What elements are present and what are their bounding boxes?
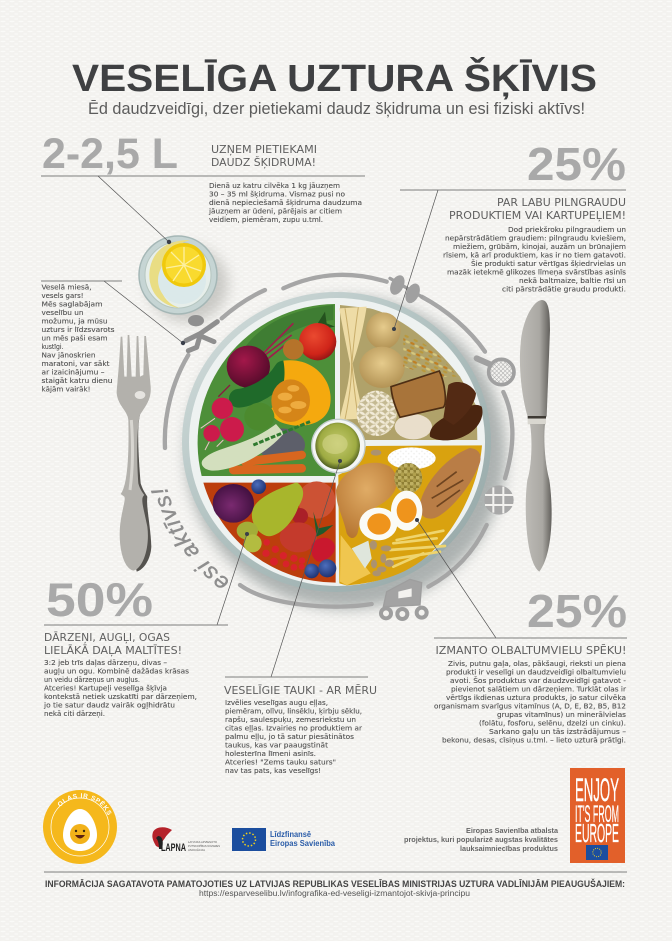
logo: LAPNA: LAPNA bbox=[161, 842, 186, 854]
footer source statement: INFORMĀCIJA SAGATAVOTA PAMATOJOTIES UZ LATVIJAS REPUBLIKAS VESELĪBAS MINISTRIJAS UZTURA VADLĪNIJĀM PIEAUGUŠAJIEM: bbox=[45, 878, 625, 889]
text: EU support note: projektus, kuri popularizē augstas kvalitātes bbox=[404, 837, 558, 844]
oil bowl bbox=[312, 419, 365, 473]
icon: roller skate bbox=[381, 579, 427, 619]
connector: fats bbox=[271, 459, 342, 677]
panel: physical activity text: Mēs saglabājam bbox=[42, 300, 102, 308]
panel: physical activity text: Nav jānoskrien bbox=[42, 352, 96, 360]
tomato bbox=[283, 312, 336, 360]
vegetables body text: Atceries! Kartupeļi veselīga šķīvja bbox=[44, 684, 167, 694]
icon: runner bbox=[186, 315, 217, 351]
cottage cheese bbox=[388, 447, 436, 469]
rice bbox=[357, 391, 397, 436]
bread bbox=[391, 371, 445, 417]
logo: Olas ir spēks badge bbox=[43, 790, 117, 864]
protein body text: (folātu, fosforu, selēnu, dzelzi un cinku). bbox=[479, 720, 626, 728]
flakes bbox=[395, 414, 432, 439]
logo: LAPNA bbox=[152, 827, 220, 854]
lettuce bbox=[258, 428, 305, 462]
seeds bbox=[403, 333, 457, 377]
fats body text: holesterīna līmeni asinīs. bbox=[225, 750, 316, 758]
green plums bbox=[237, 522, 258, 540]
connector: protein bbox=[415, 518, 496, 638]
liquids heading: DAUDZ ŠĶIDRUMA! bbox=[211, 156, 316, 169]
liquids body text bbox=[208, 182, 362, 224]
shadow of plate bbox=[186, 297, 506, 609]
protein body text: avoti. Šos produktus var daudzveidīgi gatavot - bbox=[450, 676, 627, 685]
logo: Enjoy it's from Europe bbox=[570, 768, 625, 863]
protein body text: produkti ir veselīgi un daudzveidīgi olbaltumvielu bbox=[446, 668, 626, 676]
vegetables body text: un veidu dārzeņus un augļus. bbox=[44, 676, 140, 685]
pumpkin bbox=[270, 360, 331, 426]
grains body text: citi pārstrādātie graudu produkti. bbox=[502, 286, 626, 294]
cucumber bbox=[238, 370, 283, 398]
leek bbox=[202, 424, 284, 471]
grains heading bbox=[449, 197, 626, 222]
protein body text: organismam svarīgus vitamīnus (A, D, E, B2, B5, B12 bbox=[434, 702, 626, 710]
eggs bbox=[359, 491, 422, 540]
panel: physical activity text: kājām vairāk! bbox=[42, 386, 90, 394]
panel: healthy fats bbox=[224, 677, 377, 775]
grains body text: nekā baltmaize, baltie rīsi un bbox=[519, 277, 626, 285]
fats heading: VESELĪGIE TAUKI - AR MĒRU bbox=[224, 684, 377, 697]
subtitle: Ēd daudzveidīgi, dzer pietiekami daudz šķidruma un esi fiziski aktīvs! bbox=[88, 99, 585, 118]
icon: knife bbox=[520, 300, 552, 572]
protein body text: grupas vitamīnus) un minerālvielas bbox=[497, 711, 627, 719]
vegetables heading: LIELĀKĀ DAĻA MALTĪTES! bbox=[44, 644, 182, 657]
icon: barbell bbox=[389, 274, 422, 304]
grains body text: Šie produkti satur vērtīgas šķiedrvielas un bbox=[471, 259, 626, 269]
carrots bbox=[233, 455, 302, 470]
nuts bbox=[370, 450, 394, 576]
curved slogan: esi aktīvs! bbox=[151, 489, 228, 588]
grains body text: nepārstrādātiem graudiem: pilngraudu kviešiem, bbox=[445, 234, 626, 242]
logo: LAPNA: PUTNKOPĪBAS NOZARES bbox=[188, 844, 220, 848]
protein body text: Zivis, putnu gaļa, olas, pākšaugi, rieksti un piena bbox=[448, 660, 626, 669]
spaghetti bbox=[339, 307, 367, 420]
panel: whole grains bbox=[400, 138, 627, 294]
liquids body text: jāuzņem ar ūdeni, pārējais ar citiem bbox=[208, 208, 342, 216]
vegetables heading bbox=[44, 631, 182, 657]
panel: physical activity text: vesels gars! bbox=[42, 292, 84, 300]
fats body text: nav tas pats, kas veselīgs! bbox=[225, 767, 321, 775]
vegetables body text: nekā citi dārzeņi. bbox=[44, 710, 105, 719]
blueberry bbox=[251, 479, 266, 494]
currants bbox=[262, 539, 305, 571]
vegetables body text: kontekstā netiek uzskatīti par dārzeņiem, bbox=[44, 693, 197, 702]
panel: physical activity text: veselību un bbox=[42, 309, 84, 317]
text: EU support note: Eiropas Savienība atbalsta bbox=[466, 828, 558, 835]
protein body text: vērtīgs ikdienas uztura produkts, jo satur cilvēka bbox=[446, 694, 626, 702]
grains body text: rīsiem, kā arī produktiem, kas ir no tiem gatavoti. bbox=[443, 252, 626, 260]
radishes bbox=[201, 398, 244, 450]
potatoes bbox=[366, 312, 401, 349]
grains body text: Dod priekšroku pilngraudiem un bbox=[508, 226, 626, 234]
pasta strips bbox=[387, 531, 445, 567]
connector: vegetables and fruit bbox=[217, 532, 249, 625]
vegetables body text: augļu un ogu. Kombinē dažādas krāsas bbox=[44, 668, 190, 676]
icon: fork bbox=[117, 335, 151, 572]
panel: physical activity text: ar izaicinājumu – bbox=[42, 368, 105, 376]
panel: physical activity text: možumu, ja mūsu bbox=[42, 318, 108, 326]
strawberry bbox=[311, 512, 335, 562]
connector: glass bbox=[98, 176, 171, 244]
fats body text: rapšu, saulespuķu, zemesriekstu un bbox=[225, 716, 356, 725]
protein figure: 25% bbox=[527, 585, 627, 637]
fats body text: Atceries! "Zems tauku saturs" bbox=[225, 758, 336, 766]
grains body text: miežiem, grūbām, kinojai, auzām un brūnajiem bbox=[453, 243, 626, 251]
icon: lemon slice bbox=[162, 243, 206, 287]
leaf bbox=[244, 403, 274, 431]
ring arcs bbox=[165, 275, 512, 607]
plate section: grains bbox=[339, 305, 483, 440]
panel: liquids bbox=[41, 130, 365, 224]
vegetables body text: 3:2 jeb trīs daļas dārzeņu, divas – bbox=[44, 659, 168, 668]
text: EU support note: lauksaimniecības produktus bbox=[460, 846, 558, 853]
fats body text: palmu eļļu, jo tā satur piesātinātos bbox=[225, 733, 355, 742]
liquids body text: veidiem, piemēram, zupu u.tml. bbox=[209, 216, 323, 224]
vegetables heading: DĀRZEŅI, AUGĻI, OGAS bbox=[44, 631, 170, 644]
connector: activity bbox=[104, 281, 185, 345]
fats body text: Izvēlies veselīgas augu eļļas, bbox=[225, 699, 328, 708]
fats body text: citas eļļas. Izvairies no produktiem ar bbox=[225, 724, 362, 734]
footer url: https://esparveselibu.lv/infografika-ed-veseligi-izmantojot-skivja-principu bbox=[199, 889, 470, 898]
panel: vegetables and fruit bbox=[43, 573, 228, 719]
vegetables figure: 50% bbox=[46, 573, 153, 626]
liquids body text: 30 – 35 ml šķidruma. Vismaz pusi no bbox=[209, 190, 345, 200]
panel: physical activity text: maratoni, var sākt bbox=[42, 360, 110, 368]
liquids heading: UZŅEM PIETIEKAMI bbox=[211, 144, 317, 156]
panel: physical activity text: Veselā miesā, bbox=[42, 284, 92, 292]
logo: EU flag co-financing bbox=[232, 828, 336, 851]
plate bbox=[182, 292, 491, 592]
dark bread bbox=[430, 382, 483, 440]
panel: physical activity text: kustīgi. bbox=[42, 343, 64, 351]
blueberries bbox=[304, 564, 319, 578]
vegetables body text: jo tie satur daudz vairāk ogļhidrātu bbox=[43, 702, 175, 710]
icon: tennis racket bbox=[477, 358, 514, 385]
fats body text bbox=[225, 699, 362, 775]
liquids body text: dienā nepieciešamā šķidruma daudzuma bbox=[209, 199, 362, 208]
title: VESELĪGA UZTURA ŠĶĪVIS bbox=[72, 55, 597, 100]
panel: physical activity text bbox=[41, 281, 122, 394]
logo: Olas ir spēks badge: OLAS IR SPĒKS bbox=[58, 793, 112, 815]
protein body text: bekonu, desas, cīsiņus u.tml. – lieto uzturā prātīgi. bbox=[442, 736, 626, 746]
liquids heading bbox=[211, 144, 317, 169]
protein body text: Sarkano gaļu un tās izstrādājumus – bbox=[489, 728, 627, 737]
cheese bbox=[340, 535, 371, 585]
connector: grains bbox=[392, 190, 438, 331]
protein heading: IZMANTO OLBALTUMVIELU SPĒKU! bbox=[436, 644, 626, 657]
fats body text: piemēram, olīvu, linsēklu, ķirbju sēklu, bbox=[225, 708, 362, 716]
panel: protein bbox=[434, 585, 627, 746]
panel: physical activity text: un mēs paši esam bbox=[42, 334, 108, 342]
grains figure: 25% bbox=[527, 138, 626, 190]
panel: physical activity text: uzturs ir līdzsvarots bbox=[42, 326, 115, 334]
pear bbox=[252, 482, 303, 536]
fats body text: taukus, kas var paaugstināt bbox=[225, 742, 328, 750]
liquids body text: Dienā uz katru cilvēka 1 kg jāuzņem bbox=[209, 182, 340, 191]
plate section: vegetables bbox=[198, 304, 336, 476]
footer bbox=[44, 872, 627, 898]
grains body text: mazāk ietekmē glikozes līmeņa svārstības asinīs bbox=[447, 268, 627, 278]
icon: glass of water with lemon bbox=[139, 236, 228, 322]
logo: LAPNA: ASOCIĀCIJA bbox=[188, 848, 205, 852]
protein body text bbox=[434, 660, 627, 746]
chicken leg bbox=[336, 463, 397, 538]
grains heading: PAR LABU PILNGRAUDU bbox=[497, 197, 626, 209]
activity ring around the plate bbox=[165, 274, 514, 619]
grains body text bbox=[443, 226, 627, 294]
vegetables body text bbox=[43, 659, 197, 719]
protein body text: pievienot salātiem un dārzeņiem. Turklāt olas ir bbox=[451, 686, 626, 694]
apple bbox=[298, 481, 335, 519]
plate section: protein bbox=[336, 445, 482, 585]
arugula bbox=[253, 422, 310, 445]
logo: EU flag co-financing: Eiropas Savienība bbox=[270, 839, 336, 848]
liquids figure: 2-2,5 L bbox=[42, 130, 178, 178]
icon: ball bbox=[484, 485, 514, 515]
grains heading: PRODUKTIEM VAI KARTUPEĻIEM! bbox=[449, 210, 626, 222]
beet bbox=[218, 323, 293, 397]
text: EU support note bbox=[404, 828, 558, 853]
panel: physical activity text: staigāt katru dienu bbox=[42, 377, 112, 385]
plate section: fruit and berries bbox=[203, 479, 336, 583]
logo: EU flag co-financing: Līdzfinansē bbox=[270, 830, 312, 839]
logo: LAPNA: LATVIJAS APVIENOTO bbox=[188, 840, 218, 844]
plums bbox=[213, 484, 254, 523]
lentils bbox=[394, 463, 422, 494]
chicken breast bbox=[420, 448, 481, 519]
